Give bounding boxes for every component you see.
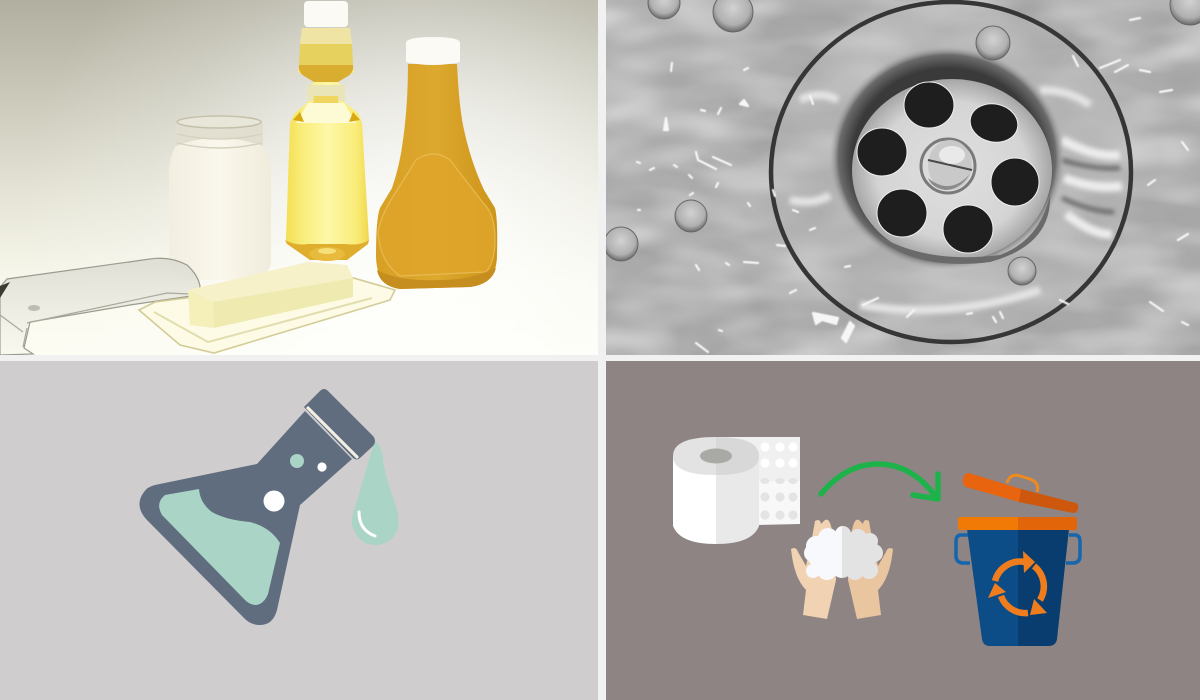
- syrup-style oil bottle: [285, 1, 369, 261]
- glass butter plate: [139, 277, 395, 353]
- icon: toilet paper roll: [673, 437, 800, 544]
- mustard bottle cap: [406, 37, 460, 65]
- lid knob: [1007, 475, 1038, 492]
- dark funnel around strainer: [829, 46, 1065, 270]
- photo backdrop: [0, 0, 598, 355]
- left hand: [791, 520, 836, 619]
- jar of white fat: [169, 115, 271, 280]
- centre screw: [921, 139, 975, 193]
- wet steel background: [606, 0, 1200, 355]
- drain holes: [857, 82, 1039, 253]
- icon: recycling bin: [956, 473, 1080, 646]
- recycling symbol: [988, 551, 1047, 615]
- pouring drop: [352, 441, 398, 545]
- large bubble: [264, 490, 284, 512]
- icon: chemical flask pouring: [139, 389, 398, 625]
- arrow: green curved: [821, 464, 938, 499]
- roll top: [673, 437, 716, 475]
- bin lid: [963, 473, 1078, 513]
- mustard squeeze bottle: [376, 37, 497, 289]
- panel: disposal on taupe background: [606, 361, 1200, 700]
- soap foam: [804, 526, 883, 580]
- white water flecks: [637, 18, 1188, 352]
- flask liquid: [159, 489, 280, 605]
- strainer plate: [852, 79, 1052, 264]
- flask cap: [304, 389, 375, 460]
- glass butter dish lid: [0, 258, 200, 355]
- panel: kitchen sink drain photo: [604, 0, 1200, 355]
- flask body: [139, 411, 352, 625]
- stick of butter: [188, 262, 353, 328]
- small bubble: [317, 462, 327, 472]
- drain outer ring: [771, 2, 1131, 342]
- bin body: [967, 529, 1018, 646]
- mint bubble: [290, 454, 304, 468]
- bin handles: [956, 535, 1080, 563]
- oil bottle cap: [304, 1, 348, 27]
- panel: cooking fats and oils photo: [0, 0, 598, 355]
- icon: hands holding foam: [791, 520, 893, 619]
- grey panel background: [0, 361, 598, 700]
- taupe panel background: [606, 361, 1200, 700]
- cap rim highlight: [308, 408, 357, 457]
- roll side: [673, 456, 716, 544]
- paper sheet: [716, 437, 800, 525]
- bin rim: [958, 517, 1018, 530]
- panel: chemicals on grey background: [0, 361, 598, 700]
- water droplets: [604, 0, 1200, 285]
- right hand: [848, 520, 893, 619]
- roll hole: [700, 448, 732, 464]
